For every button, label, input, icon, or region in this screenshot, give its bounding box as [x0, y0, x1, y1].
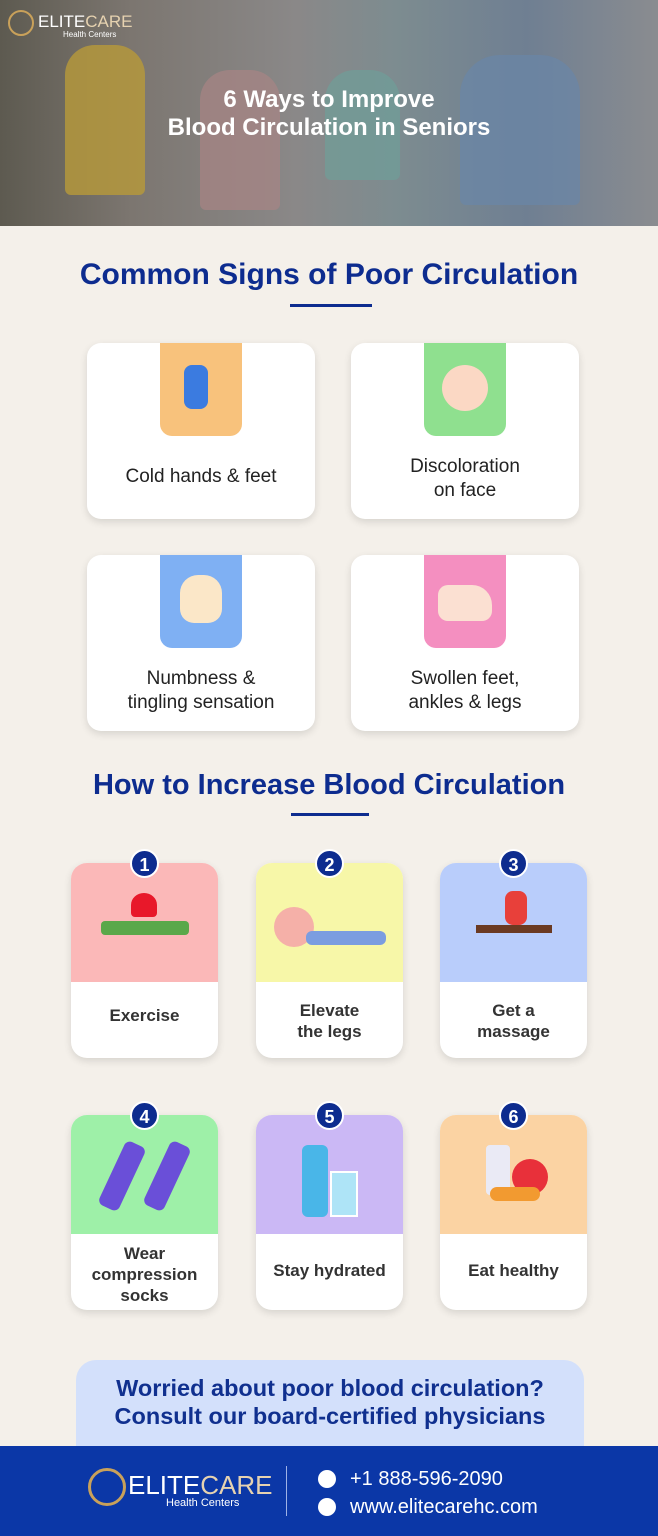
- card: discoloration: [351, 343, 579, 519]
- step 2: Elevate: [300, 1001, 359, 1020]
- step 5: 5: [324, 1107, 334, 1127]
- contact info: [318, 1468, 538, 1518]
- card: swollen: [351, 555, 579, 731]
- step 6: [440, 1115, 587, 1310]
- CTA callout: Worried about poor blood circulation?: [116, 1375, 544, 1401]
- heading: how to increase: How to Increase Blood Circulation: [93, 769, 565, 801]
- contact info: www.elitecarehc.com: [350, 1496, 538, 1518]
- step 4: compression: [92, 1265, 197, 1284]
- step 3: Get a: [492, 1001, 535, 1020]
- step 5: Stay hydrated: [273, 1261, 386, 1280]
- step 4: socks: [120, 1286, 169, 1305]
- step 1: 1: [139, 855, 150, 875]
- step 2: [256, 863, 403, 1058]
- card: cold hands: [87, 343, 315, 519]
- footer logo: ELITECARE: [128, 1470, 272, 1500]
- step 6: 6: [508, 1107, 518, 1127]
- step 1: Exercise: [110, 1006, 179, 1025]
- step 6: Eat healthy: [468, 1261, 559, 1280]
- card: swollen: ankles & legs: [408, 692, 522, 713]
- contact info: +1 888-596-2090: [350, 1468, 503, 1490]
- footer: [0, 1446, 658, 1536]
- card: numbness: tingling sensation: [128, 692, 274, 713]
- heading: common signs: Common Signs of Poor Circulation: [80, 258, 578, 291]
- title: [168, 86, 490, 141]
- step 3: 3: [508, 855, 518, 875]
- logo: Health Centers: [63, 30, 116, 39]
- step 4: [71, 1115, 218, 1310]
- card: discoloration: on face: [434, 480, 496, 501]
- logo: [8, 10, 132, 39]
- title: 6 Ways to Improve: [223, 86, 435, 113]
- header photo banner: [0, 0, 658, 226]
- step 3: massage: [477, 1022, 550, 1041]
- CTA callout: [76, 1360, 584, 1450]
- card: numbness: Numbness &: [147, 668, 255, 689]
- step 1: [71, 863, 218, 1058]
- footer logo: Health Centers: [166, 1497, 239, 1509]
- step 4: 4: [139, 1107, 150, 1127]
- card: swollen: Swollen feet,: [411, 668, 519, 689]
- step 4: Wear: [124, 1244, 165, 1263]
- step 2: 2: [324, 855, 334, 875]
- footer logo: [88, 1468, 272, 1509]
- title: Blood Circulation in Seniors: [168, 114, 490, 141]
- logo: ELITECARE: [38, 12, 132, 31]
- CTA callout: Consult our board-certified physicians: [115, 1403, 545, 1429]
- step 2: the legs: [297, 1022, 362, 1041]
- card: numbness: [87, 555, 315, 731]
- step 3: [440, 863, 587, 1058]
- card: discoloration: Discoloration: [410, 456, 520, 477]
- card: cold hands: Cold hands & feet: [125, 466, 277, 487]
- step 5: [256, 1115, 403, 1310]
